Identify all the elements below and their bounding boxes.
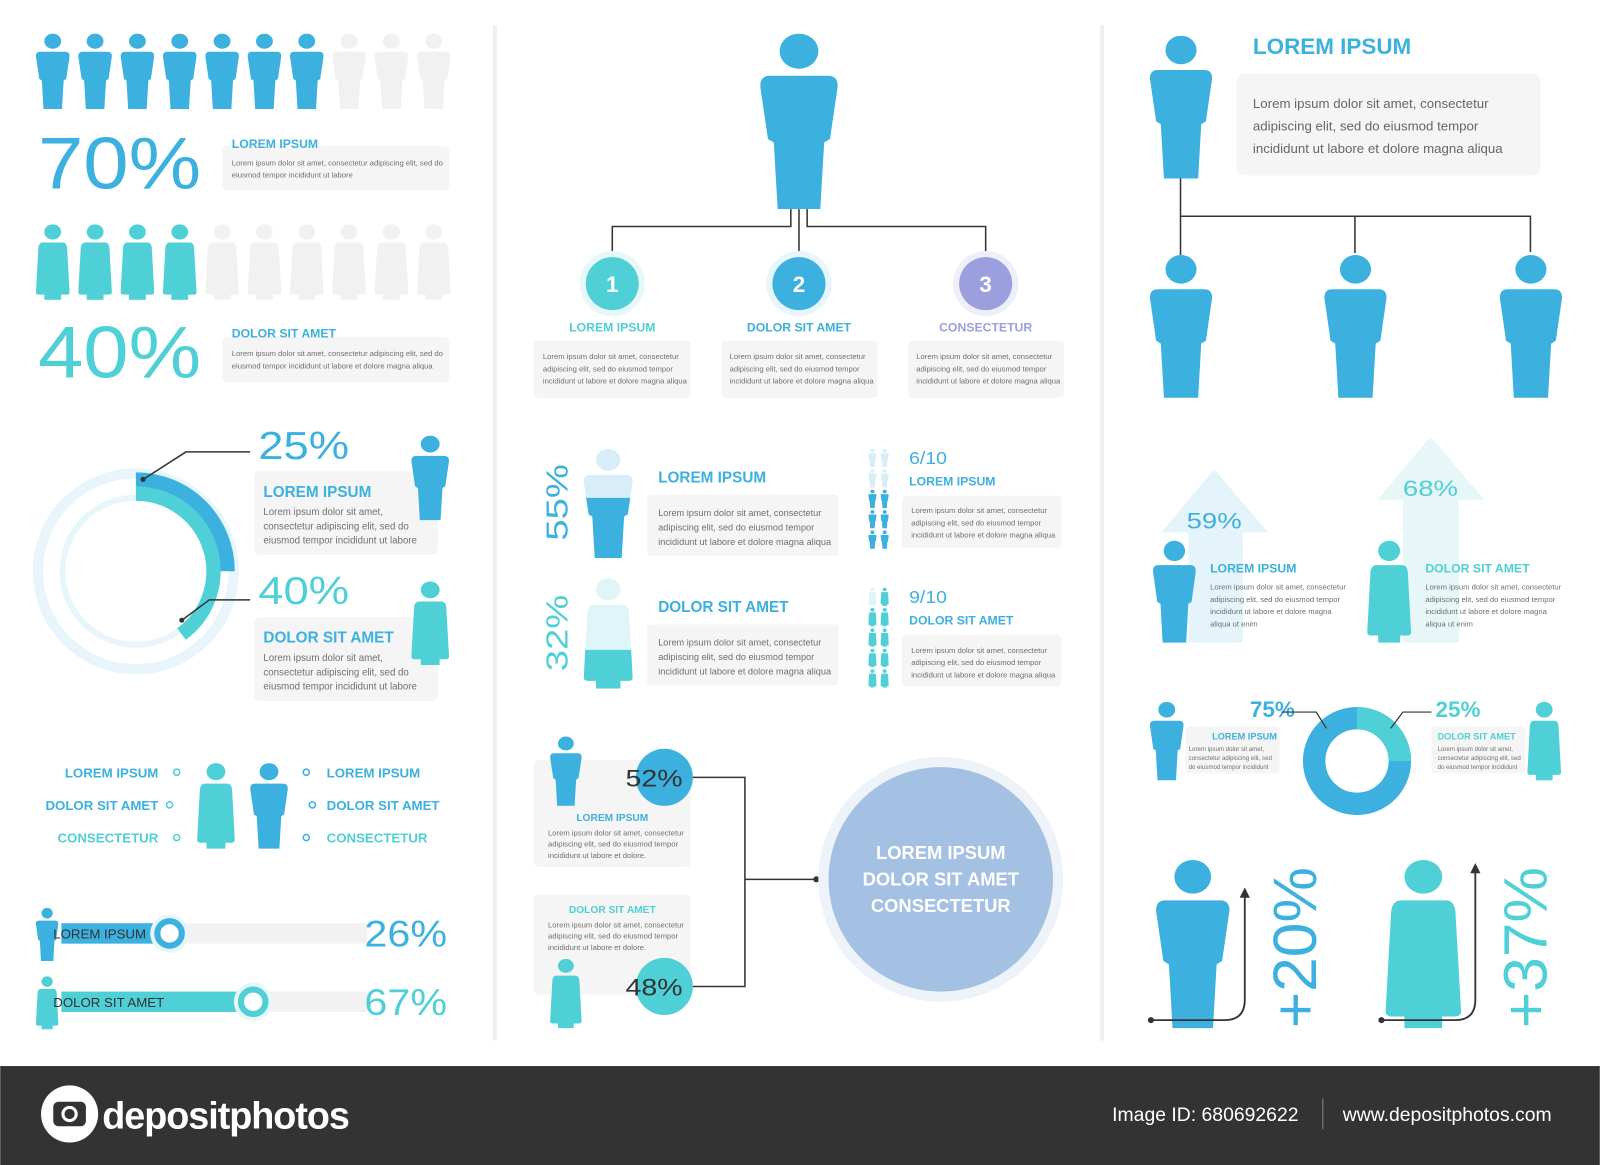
arrow stat 68%: adipiscing elit, sed do eiusmod tempor bbox=[1425, 595, 1556, 604]
connector lines bbox=[692, 777, 816, 986]
text block: dolor sit amet 40: DOLOR SIT AMET bbox=[232, 327, 337, 341]
big circle bbox=[813, 757, 1063, 1002]
card: 48% dolor sit amet bbox=[534, 895, 693, 1028]
big circle: DOLOR SIT AMET bbox=[863, 868, 1020, 889]
callout: 25% lorem ipsum: 25% bbox=[258, 425, 349, 468]
text block: lorem ipsum 70 bbox=[223, 137, 449, 191]
chart: donut 75/25: consectetur adipiscing elit, sed bbox=[1438, 755, 1521, 762]
step 3: incididunt ut labore et dolore magna aliqua bbox=[916, 377, 1061, 386]
callout: 25% lorem ipsum bbox=[254, 425, 449, 555]
stat: 6/10: adipiscing elit, sed do eiusmod tempor bbox=[911, 518, 1042, 527]
step 1 bbox=[534, 251, 691, 398]
arrow stat 68% bbox=[1367, 437, 1562, 643]
step 2: Lorem ipsum dolor sit amet, consectetur bbox=[730, 352, 866, 361]
stat: 6/10: incididunt ut labore et dolore magna aliqua bbox=[911, 531, 1056, 540]
step 2: DOLOR SIT AMET bbox=[747, 321, 852, 335]
bar: lorem ipsum 26%: 26% bbox=[364, 914, 447, 955]
chart: donut 75/25: Lorem ipsum dolor sit amet, bbox=[1189, 746, 1264, 753]
step 1: incididunt ut labore et dolore magna aliqua bbox=[543, 377, 688, 386]
arrow stat 68%: incididunt ut labore et dolore magna bbox=[1425, 607, 1548, 616]
footer bar: Image ID: 680692622 bbox=[1112, 1104, 1299, 1126]
arrow stat 59%: aliqua ut enim bbox=[1210, 619, 1258, 628]
card: 52% lorem ipsum: Lorem ipsum dolor sit amet, consectetur bbox=[548, 828, 684, 837]
callout: 40% dolor sit amet bbox=[254, 570, 449, 701]
bar: dolor sit amet 67%: 67% bbox=[364, 982, 447, 1023]
callout: 40% dolor sit amet: consectetur adipiscing elit, sed do bbox=[263, 667, 409, 678]
growth: +37% woman: +37% bbox=[1492, 867, 1560, 1028]
card: 48% dolor sit amet: Lorem ipsum dolor sit amet, consectetur bbox=[548, 920, 684, 929]
heading: lorem ipsum col3 bbox=[1150, 34, 1541, 179]
callout: 25% lorem ipsum: LOREM IPSUM bbox=[263, 484, 371, 501]
panel: women 40% row bbox=[36, 224, 451, 300]
bar: lorem ipsum 26%: LOREM IPSUM bbox=[53, 927, 146, 942]
bar: lorem ipsum 26% bbox=[36, 908, 447, 961]
callout: 25% lorem ipsum: eiusmod tempor incididunt ut labore bbox=[263, 536, 417, 547]
big circle: LOREM IPSUM bbox=[876, 842, 1006, 863]
card: 48% dolor sit amet: DOLOR SIT AMET bbox=[569, 905, 656, 916]
card: 52% lorem ipsum: LOREM IPSUM bbox=[576, 813, 648, 824]
stat: 32% woman: 32% bbox=[540, 595, 574, 671]
arrow stat 68%: aliqua ut enim bbox=[1425, 619, 1473, 628]
growth: +20% man bbox=[1148, 860, 1329, 1028]
heading: lorem ipsum col3: LOREM IPSUM bbox=[1253, 34, 1411, 59]
bar: dolor sit amet 67%: DOLOR SIT AMET bbox=[53, 995, 164, 1010]
legend: gender labels: CONSECTETUR bbox=[57, 831, 159, 846]
step 1: adipiscing elit, sed do eiusmod tempor bbox=[543, 364, 673, 373]
stat: 55% man: adipiscing elit, sed do eiusmod tempor bbox=[658, 522, 814, 532]
step 3: CONSECTETUR bbox=[939, 321, 1032, 335]
legend: gender labels bbox=[45, 763, 440, 849]
arrow stat 68%: Lorem ipsum dolor sit amet, consectetur bbox=[1425, 583, 1562, 592]
callout: 40% dolor sit amet: Lorem ipsum dolor sit amet, bbox=[263, 653, 383, 664]
legend: gender labels: LOREM IPSUM bbox=[327, 765, 420, 780]
stat: 40%: 40% bbox=[38, 311, 201, 393]
card: 52% lorem ipsum: incididunt ut labore et dolore. bbox=[548, 851, 646, 860]
step 2 bbox=[721, 251, 878, 398]
chart: donut rings bbox=[38, 452, 250, 669]
card: 52% lorem ipsum: 52% bbox=[626, 766, 683, 793]
stat: 9/10: Lorem ipsum dolor sit amet, consectetur bbox=[911, 646, 1048, 655]
card: 52% lorem ipsum bbox=[534, 737, 693, 867]
step 1: 1 bbox=[606, 272, 619, 297]
growth: +37% woman bbox=[1378, 860, 1560, 1028]
big circle: CONSECTETUR bbox=[871, 895, 1011, 916]
stat: 6/10: 6/10 bbox=[909, 448, 947, 468]
arrow stat 59%: 59% bbox=[1187, 508, 1242, 533]
legend: gender labels: CONSECTETUR bbox=[327, 831, 428, 846]
chart: donut 75/25: Lorem ipsum dolor sit amet, bbox=[1438, 746, 1513, 753]
icon: big man with org connectors bbox=[612, 34, 986, 253]
stat: 55% man: 55% bbox=[540, 464, 574, 541]
stat: 9/10: incididunt ut labore et dolore magna aliqua bbox=[911, 670, 1056, 679]
growth: +20% man: +20% bbox=[1261, 867, 1329, 1028]
tree diagram bbox=[1150, 179, 1562, 398]
heading: lorem ipsum col3: Lorem ipsum dolor sit amet, consectetur bbox=[1253, 96, 1489, 111]
text block: lorem ipsum 70: Lorem ipsum dolor sit amet, consectetur adipiscing elit, sed do bbox=[232, 158, 443, 167]
callout: 25% lorem ipsum: Lorem ipsum dolor sit amet, bbox=[263, 507, 383, 518]
stat: 32% woman: adipiscing elit, sed do eiusmod tempor bbox=[658, 652, 814, 662]
step 2: adipiscing elit, sed do eiusmod tempor bbox=[730, 364, 860, 373]
legend: gender labels: DOLOR SIT AMET bbox=[45, 798, 158, 813]
step 3: 3 bbox=[979, 272, 992, 297]
stat: 55% man bbox=[540, 449, 839, 558]
heading: lorem ipsum col3: adipiscing elit, sed do eiusmod tempor bbox=[1253, 119, 1479, 134]
stat: 9/10: DOLOR SIT AMET bbox=[909, 613, 1014, 627]
callout: 40% dolor sit amet: 40% bbox=[258, 570, 349, 613]
stat: 32% woman: incididunt ut labore et dolore magna aliqua bbox=[658, 666, 832, 676]
text block: dolor sit amet 40 bbox=[223, 327, 449, 383]
text block: lorem ipsum 70: eiusmod tempor incididunt ut labore bbox=[232, 171, 353, 180]
step 2: incididunt ut labore et dolore magna aliqua bbox=[730, 377, 874, 386]
card: 48% dolor sit amet: 48% bbox=[626, 975, 683, 1002]
step 1: LOREM IPSUM bbox=[569, 321, 655, 335]
chart: donut 75/25: 25% bbox=[1436, 697, 1481, 722]
arrow stat 59%: incididunt ut labore et dolore magna bbox=[1210, 607, 1332, 616]
step 3: adipiscing elit, sed do eiusmod tempor bbox=[916, 364, 1047, 373]
chart: donut 75/25 bbox=[1150, 697, 1561, 804]
arrow stat 59% bbox=[1153, 469, 1346, 643]
chart: donut 75/25: DOLOR SIT AMET bbox=[1438, 732, 1516, 742]
arrow stat 59%: Lorem ipsum dolor sit amet, consectetur bbox=[1210, 583, 1346, 592]
footer bar: www.depositphotos.com bbox=[1342, 1104, 1552, 1126]
heading: lorem ipsum col3: incididunt ut labore et dolore magna aliqua bbox=[1253, 141, 1503, 156]
step 2: 2 bbox=[793, 272, 805, 297]
step 3 bbox=[908, 251, 1064, 398]
chart: donut 75/25: 75% bbox=[1250, 697, 1295, 722]
text block: dolor sit amet 40: eiusmod tempor incididunt ut labore et dolore magna aliqua bbox=[232, 361, 433, 370]
chart: donut 75/25: do eiusmod tempor incididunt bbox=[1438, 764, 1518, 771]
arrow stat 59%: LOREM IPSUM bbox=[1210, 561, 1296, 575]
arrow stat 59%: adipiscing elit, sed do eiusmod tempor bbox=[1210, 595, 1341, 604]
text block: dolor sit amet 40: Lorem ipsum dolor sit amet, consectetur adipiscing elit, sed do bbox=[232, 349, 443, 358]
legend: gender labels: DOLOR SIT AMET bbox=[327, 798, 440, 813]
stat: 55% man: Lorem ipsum dolor sit amet, consectetur bbox=[658, 508, 821, 518]
stat: 32% woman: DOLOR SIT AMET bbox=[658, 599, 789, 616]
step 3: Lorem ipsum dolor sit amet, consectetur bbox=[916, 352, 1053, 361]
stat: 32% woman: Lorem ipsum dolor sit amet, consectetur bbox=[658, 638, 821, 648]
stat: 55% man: incididunt ut labore et dolore magna aliqua bbox=[658, 537, 832, 547]
bar: dolor sit amet 67% bbox=[36, 976, 447, 1029]
arrow stat 68%: 68% bbox=[1403, 476, 1458, 501]
step 1: Lorem ipsum dolor sit amet, consectetur bbox=[543, 352, 679, 361]
chart: donut 75/25: consectetur adipiscing elit, sed bbox=[1189, 755, 1272, 762]
stat: 6/10 bbox=[868, 448, 1061, 549]
stat: 6/10: LOREM IPSUM bbox=[909, 475, 995, 489]
chart: donut 75/25: do eiusmod tempor incididunt bbox=[1189, 764, 1269, 771]
stat: 9/10 bbox=[868, 587, 1061, 688]
footer bar bbox=[0, 1066, 1600, 1165]
stat: 70%: 70% bbox=[38, 123, 201, 205]
legend: gender labels: LOREM IPSUM bbox=[65, 765, 158, 780]
stat: 9/10: 9/10 bbox=[909, 587, 947, 607]
callout: 25% lorem ipsum: consectetur adipiscing elit, sed do bbox=[263, 521, 409, 532]
card: 48% dolor sit amet: incididunt ut labore et dolore. bbox=[548, 943, 646, 952]
panel: men 70% row bbox=[36, 34, 451, 109]
card: 48% dolor sit amet: adipiscing elit, sed do eiusmod tempor bbox=[548, 932, 678, 941]
chart: donut 75/25: LOREM IPSUM bbox=[1212, 732, 1277, 742]
stat: 55% man: LOREM IPSUM bbox=[658, 470, 766, 487]
footer bar: depositphotos bbox=[102, 1094, 349, 1136]
arrow stat 68%: DOLOR SIT AMET bbox=[1425, 561, 1530, 575]
callout: 40% dolor sit amet: DOLOR SIT AMET bbox=[263, 630, 394, 647]
stat: 32% woman bbox=[540, 578, 839, 689]
text block: lorem ipsum 70: LOREM IPSUM bbox=[232, 137, 318, 151]
callout: 40% dolor sit amet: eiusmod tempor incididunt ut labore bbox=[263, 682, 417, 693]
card: 52% lorem ipsum: adipiscing elit, sed do eiusmod tempor bbox=[548, 840, 678, 849]
stat: 9/10: adipiscing elit, sed do eiusmod tempor bbox=[911, 658, 1042, 667]
stat: 6/10: Lorem ipsum dolor sit amet, consectetur bbox=[911, 506, 1048, 515]
